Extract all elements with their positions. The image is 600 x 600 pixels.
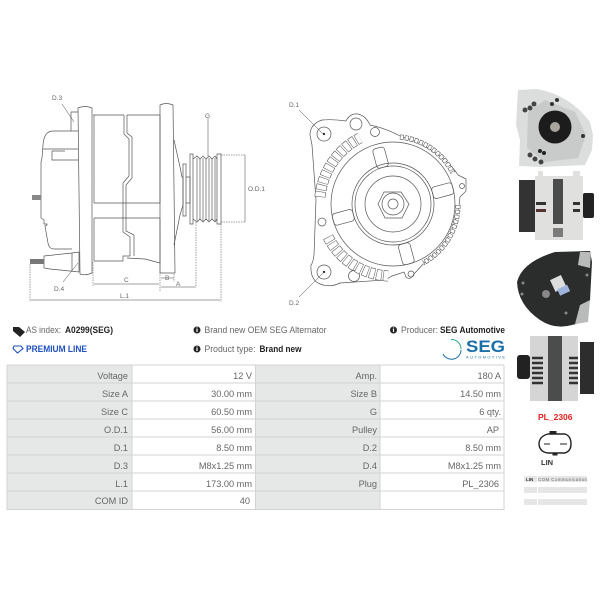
logo: SEG Automotive: SEG <box>466 337 505 356</box>
info: producer: Producer: <box>401 325 438 335</box>
rear stud <box>32 195 41 200</box>
info: product type <box>194 344 302 354</box>
labels: D.1 <box>289 102 300 109</box>
pin table <box>524 476 587 505</box>
table labels: Size A <box>102 389 129 399</box>
rear cover <box>41 131 78 249</box>
photo: alternator side 2 <box>517 336 594 401</box>
table values: 40 <box>240 496 250 506</box>
table values: 8.50 mm <box>216 443 252 453</box>
dimension labels <box>52 95 265 300</box>
info: producer <box>390 325 505 335</box>
vent slots <box>320 137 458 276</box>
dimension labels: D.3 <box>52 95 62 102</box>
table labels: D.3 <box>114 461 128 471</box>
lower connector D.4 <box>44 252 79 272</box>
table labels: Size B <box>350 389 377 399</box>
table values: M8x1.25 mm <box>448 461 501 471</box>
table values: 14.50 mm <box>460 389 501 399</box>
diagram: alternator side view <box>30 95 265 302</box>
icon: LIN plug connector <box>539 432 571 455</box>
mounting holes <box>317 118 464 282</box>
info: brand new: Brand new OEM SEG Alternator <box>204 325 326 335</box>
rear flange <box>78 106 92 275</box>
plug label: LIN <box>541 458 553 467</box>
icon: info <box>194 326 200 334</box>
info row: AS index: AS index: <box>26 325 61 335</box>
leader lines <box>299 110 324 297</box>
icon: info <box>390 326 397 334</box>
dimension lines <box>30 104 246 302</box>
table labels <box>95 371 377 506</box>
info row: AS index <box>13 325 113 337</box>
diagram: alternator front view <box>289 102 466 307</box>
info: producer: SEG Automotive <box>440 325 505 335</box>
icon: diamond <box>13 346 23 353</box>
front dome <box>174 140 183 245</box>
table labels: Size C <box>101 407 128 417</box>
photo: alternator front <box>516 89 593 167</box>
table labels: Amp. <box>356 371 377 381</box>
table labels: COM ID <box>95 496 128 506</box>
dimension labels: D.4 <box>54 286 64 293</box>
diagram: alternator front view: D.2 <box>289 300 300 307</box>
dimension labels: O.D.1 <box>248 186 265 193</box>
hub rings <box>352 163 434 245</box>
icon: tags <box>13 327 25 337</box>
hex nut <box>378 192 409 218</box>
logo ring <box>443 339 461 359</box>
table values: 56.00 mm <box>211 425 252 435</box>
dimension labels: B <box>165 275 169 282</box>
pin table: COM Communication <box>538 477 587 482</box>
table values: PL_2306 <box>462 479 499 489</box>
photo: alternator rear <box>517 251 592 327</box>
table values: AP <box>487 425 499 435</box>
spokes <box>332 146 454 265</box>
table values: 8.50 mm <box>465 443 501 453</box>
stator body <box>93 115 160 263</box>
info: product type: Brand new <box>260 344 302 354</box>
table labels: L.1 <box>115 479 128 489</box>
front flange <box>160 104 175 273</box>
table values: 30.00 mm <box>211 389 252 399</box>
table labels: D.4 <box>363 461 377 471</box>
dimension labels: L.1 <box>120 293 129 300</box>
info row: AS index: A0299(SEG) <box>65 325 113 335</box>
dimension labels: G <box>205 113 210 120</box>
specification table <box>7 365 504 510</box>
photo: alternator side <box>519 171 594 240</box>
table labels: Pulley <box>352 425 377 435</box>
pulley <box>190 154 221 224</box>
table values: 60.50 mm <box>211 407 252 417</box>
info: product type: Product type: <box>204 344 256 354</box>
logo: SEG Automotive <box>443 337 505 360</box>
dimension labels: A <box>176 281 181 288</box>
outer disc <box>331 142 455 266</box>
dimension labels: C <box>124 277 129 284</box>
table values: M8x1.25 mm <box>199 461 252 471</box>
mounting boss D.3 <box>71 112 78 131</box>
table values: 12 V <box>233 371 253 381</box>
table values <box>199 371 502 506</box>
table values: 180 A <box>477 371 502 381</box>
premium line badge: PREMIUM LINE <box>26 344 87 354</box>
table labels: D.2 <box>363 443 377 453</box>
table labels: D.1 <box>114 443 128 453</box>
table labels: O.D.1 <box>104 425 128 435</box>
pin table: LIN <box>526 477 533 482</box>
table values: 173.00 mm <box>206 479 252 489</box>
table labels: G <box>370 407 377 417</box>
plug code: PL_2306 <box>538 412 573 422</box>
table labels: Plug <box>359 479 377 489</box>
housing outline <box>310 114 466 286</box>
icon: info <box>194 346 200 352</box>
logo: SEG Automotive: AUTOMOTIVE <box>466 354 505 360</box>
table labels: Voltage <box>97 371 128 381</box>
table values: 6 qty. <box>479 407 501 417</box>
